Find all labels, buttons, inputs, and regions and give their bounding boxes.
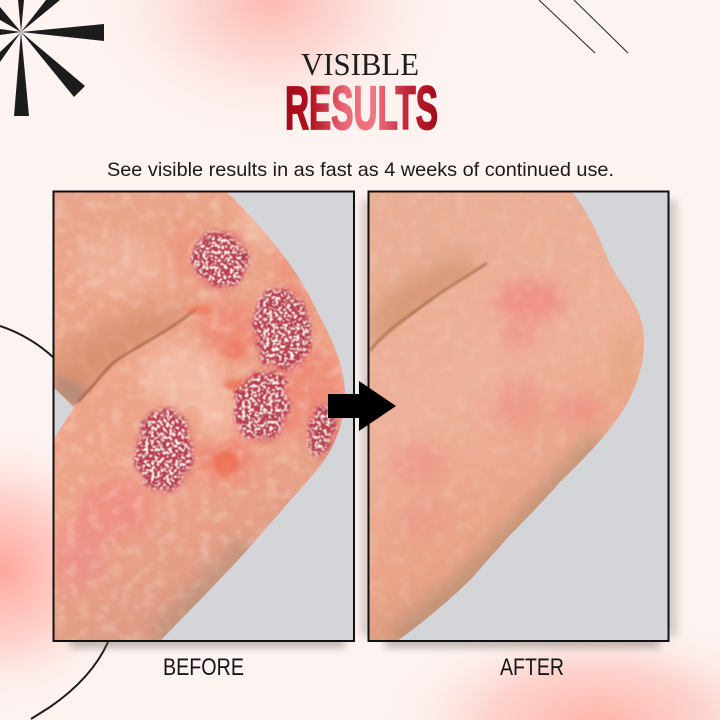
upper arm shade (54, 305, 200, 408)
subtitle: See visible results in as fast as 4 weeks of continued use. (107, 159, 614, 181)
red irritation (54, 220, 341, 590)
healed arm (368, 191, 670, 642)
panel: before photo (53, 191, 355, 642)
fresh orange sores (187, 305, 252, 475)
label: after: AFTER (500, 654, 564, 681)
arm edge shading (160, 547, 250, 641)
elbow crease (370, 263, 487, 351)
title: VISIBLE: VISIBLE (301, 46, 419, 82)
skin texture (370, 193, 616, 618)
panel: after border (368, 192, 668, 641)
background wedge (54, 388, 74, 438)
title: RESULTS: RESULTS (285, 74, 438, 142)
decorative arc (0, 326, 108, 719)
plaque halos (136, 230, 338, 494)
upper arm shade (369, 255, 490, 358)
residual redness (392, 280, 604, 542)
arm with lesions (53, 191, 355, 642)
label: before: BEFORE (163, 654, 244, 681)
psoriasis plaques (134, 222, 342, 493)
elbow crease (78, 309, 196, 402)
arrow (328, 381, 396, 431)
icon: sunburst (0, 0, 104, 116)
panel: before border (54, 192, 354, 641)
panel shadows (70, 200, 677, 648)
decorative diagonal lines (539, 0, 628, 53)
skin texture (53, 191, 355, 642)
panel: after photo (368, 191, 670, 642)
tan shading (397, 330, 628, 641)
lighter patches (80, 208, 272, 442)
